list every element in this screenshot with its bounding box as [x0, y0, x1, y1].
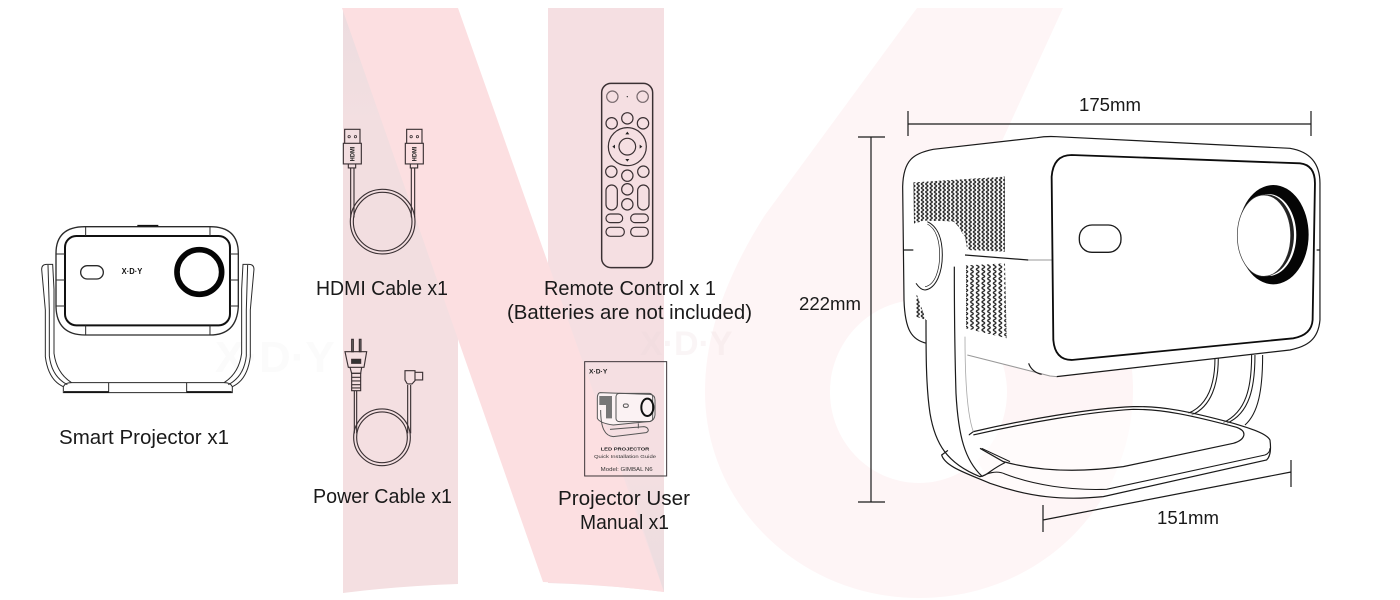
icon: small arc [1029, 363, 1042, 374]
icon: cable loop [351, 168, 415, 217]
icon: rear arm [1188, 355, 1263, 425]
panel: user manual [585, 362, 667, 476]
icon: remote body [602, 83, 653, 268]
icon: top buttons [607, 91, 648, 102]
icon: right connector [405, 129, 423, 168]
panel: remote control [602, 83, 653, 268]
icon: base feet [64, 389, 232, 394]
label: HDMI left: HDMI [350, 146, 356, 161]
manual subtitle: Quick Installation Guide [594, 454, 656, 460]
text: HDMI Cable x1: HDMI Cable x1 [316, 278, 448, 300]
label: HDMI right: HDMI [412, 146, 418, 161]
icon: lens [1237, 185, 1309, 284]
icon: lower vent [966, 263, 1007, 338]
icon: strain relief [352, 373, 361, 391]
icon: left connector [343, 129, 361, 168]
icon: arm pivot [916, 222, 942, 290]
panel: power cable [345, 339, 423, 466]
label: 151mm: 151mm [1157, 508, 1219, 528]
icon: projector body [56, 227, 238, 335]
panel: projector with dimensions [903, 136, 1320, 498]
icon: body outline [903, 136, 1320, 377]
icon: sensor pill [81, 266, 103, 279]
icon: upper buttons [606, 113, 649, 129]
manual cover [585, 362, 667, 476]
faint watermarks: X·D·Y [215, 333, 335, 382]
icon: base plate [942, 407, 1271, 498]
icon: indicator [627, 96, 628, 97]
icon: support arm [914, 221, 987, 475]
icon: connector pins [348, 135, 419, 138]
icon: base [63, 383, 232, 393]
faint watermarks: X·D·Y [1022, 309, 1104, 342]
icon: lower buttons [606, 166, 649, 210]
manual projector picture [597, 393, 655, 437]
text: Power Cable x1: Power Cable x1 [313, 486, 452, 508]
icon: body seams [56, 227, 238, 335]
icon: direction pad [608, 128, 646, 166]
dimension: depth 151mm [1043, 460, 1291, 532]
icon: body seams [903, 250, 1320, 260]
label: 222mm: 222mm [799, 294, 861, 314]
background: large pale 6 [705, 8, 1133, 598]
panel: smart projector front view [42, 226, 254, 393]
icon: left support arm [42, 264, 72, 387]
icon: plug prongs [352, 339, 361, 352]
text: manual caption: Projector User [558, 488, 690, 510]
manual model: Model: GIMBAL N6 [601, 467, 653, 473]
brand logo: X·D·Y [122, 267, 143, 276]
dimension: height 222mm [799, 137, 885, 502]
manual logo: X·D·Y [589, 368, 608, 375]
icon: base tray [973, 409, 1244, 470]
text: remote control caption [507, 278, 752, 324]
icon: cable loop [354, 385, 411, 433]
faint watermarks [215, 309, 1104, 382]
icon: right support arm [224, 264, 254, 387]
icon: top button [137, 223, 158, 228]
background: large pink N [342, 8, 664, 593]
faint watermarks: X·D·Y [640, 325, 733, 363]
icon: lens ring [177, 250, 222, 294]
text: remote control caption: (Batteries are not included) [507, 302, 752, 324]
manual title: LED PROJECTOR [601, 447, 650, 453]
icon: front panel [1052, 155, 1315, 360]
dimension: width 175mm [908, 95, 1311, 136]
icon: plug head [345, 352, 367, 373]
text: manual caption: Manual x1 [580, 512, 669, 534]
icon: front panel [65, 236, 230, 325]
text: Smart Projector x1: Smart Projector x1 [59, 427, 229, 449]
text: remote control caption: Remote Control x 1 [544, 278, 716, 300]
icon: upper vent [913, 177, 1005, 252]
text: manual caption [558, 488, 690, 534]
panel: HDMI cable [343, 129, 423, 254]
label: 175mm: 175mm [1079, 95, 1141, 115]
icon: volume pills [606, 185, 649, 210]
icon: shortcut pills [606, 214, 648, 236]
icon: sensor pill [1079, 225, 1121, 252]
icon: right angle connector [405, 371, 423, 384]
icon: projector body [903, 137, 1320, 377]
icon: side vent [915, 277, 927, 320]
